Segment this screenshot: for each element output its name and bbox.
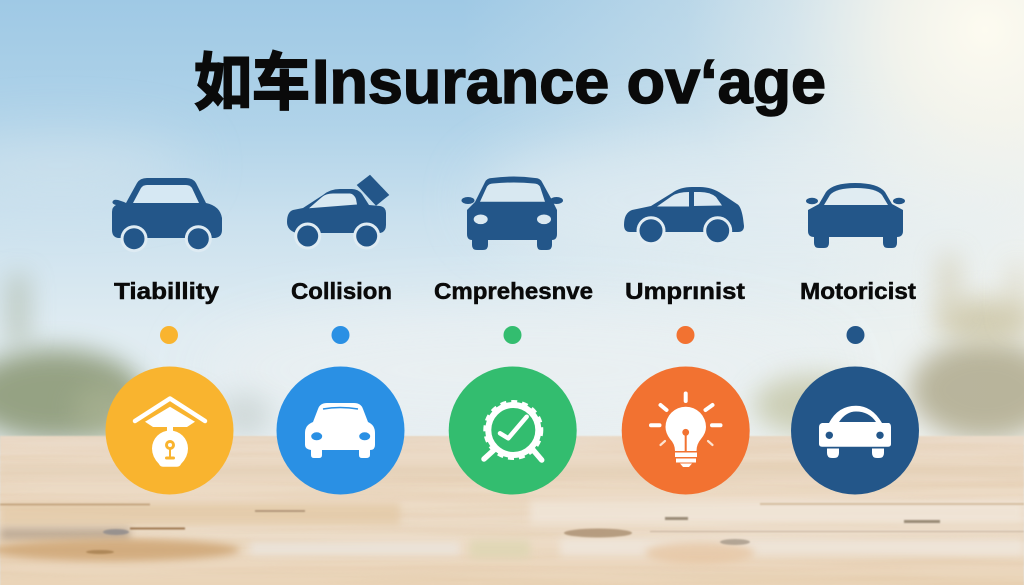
title: Insurance ov‘age <box>312 48 826 117</box>
background: blurred sky <box>0 0 1024 445</box>
badge: yellow house and lock <box>106 366 234 494</box>
icon: uninsured motorist side car <box>624 187 744 245</box>
badge: navy car <box>791 366 919 494</box>
title: 如车 <box>194 32 310 122</box>
dot: green <box>504 326 522 344</box>
badge: orange light bulb <box>622 366 750 494</box>
label: Cmprehesnve: Cmprehesnve <box>434 278 593 304</box>
icon: liability car <box>112 178 222 252</box>
label: Tiabillity: Tiabillity <box>114 278 219 304</box>
label: Umprinist: Umprınist <box>625 278 745 304</box>
badge: green check seal <box>449 366 577 494</box>
icon: motorist front car <box>806 183 905 248</box>
background: wooden table <box>0 436 1024 585</box>
background: blurred trees <box>0 255 1024 441</box>
badge: blue car <box>276 366 404 494</box>
icon: comprehensive car <box>462 176 563 250</box>
dot: blue <box>332 326 350 344</box>
dot: navy <box>846 326 864 344</box>
icon: collision car <box>287 175 389 250</box>
label: Collision: Collision <box>291 278 392 304</box>
label: Motoricist: Motoricist <box>800 278 916 304</box>
title <box>194 32 826 122</box>
dot: yellow <box>160 326 178 344</box>
dot: orange <box>676 326 694 344</box>
